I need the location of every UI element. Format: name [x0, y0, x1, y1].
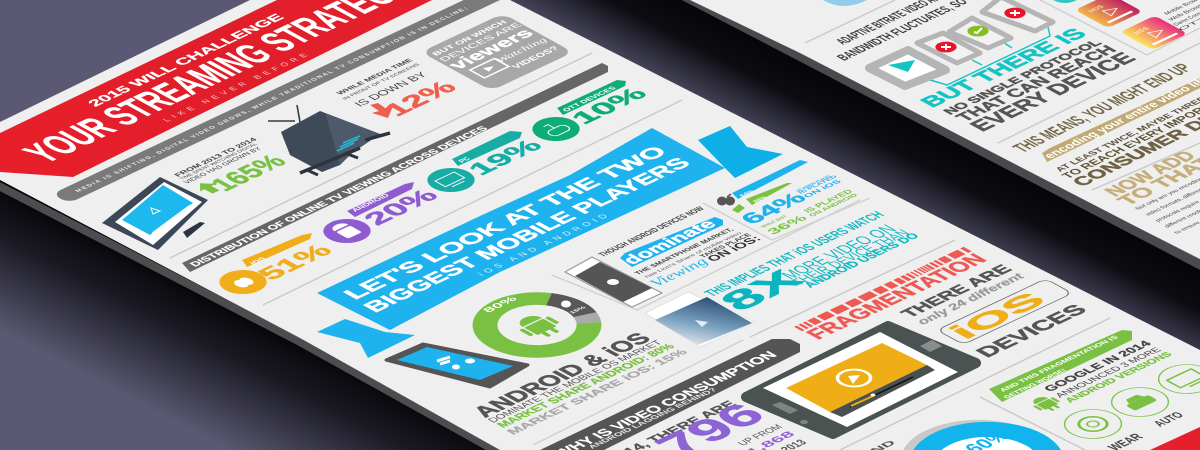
green text [760, 188, 860, 236]
icon: green up arrow [192, 180, 224, 196]
blue text: OF VIDEOS PLAYED [795, 175, 832, 192]
8x text block: MORE VIDEO ON [776, 222, 901, 282]
large cyan donut [869, 404, 1096, 450]
bottom section bar: ANDROID LAGGING BEHIND? [586, 387, 719, 450]
iphone illustration [565, 257, 662, 307]
icon: HDS tile: HDS [1087, 4, 1107, 14]
iOS tag [242, 233, 312, 267]
ribbon subheading: iOS AND ANDROID [475, 213, 610, 277]
small teal blob [1053, 0, 1077, 3]
PC tag [452, 131, 522, 166]
ios device count: DEVICES [970, 301, 1092, 360]
box text: VIDEOS? [509, 45, 561, 70]
green arrow banner: GETTING WORSE! [1003, 368, 1069, 400]
Android stat [314, 182, 445, 248]
divider [263, 100, 682, 305]
ribbon right tail [698, 126, 783, 178]
icon: apple [717, 194, 735, 206]
dominate text block: TAKES PLACE [699, 233, 754, 259]
headline: no single protocol: NO SINGLE PROTOCOL [940, 38, 1105, 116]
icon: android green [1026, 394, 1066, 414]
divider [1092, 143, 1200, 190]
icon: coral down arrow [370, 103, 393, 118]
box text: BUT ON WHICH [430, 19, 509, 57]
20 percent: 20% [357, 185, 445, 229]
icon: phone with check [949, 18, 1011, 48]
796 devices stat [585, 397, 810, 450]
10 percent: 10% [565, 84, 653, 128]
dominate text block: THE SMARTPHONE MARKET, [634, 228, 735, 276]
ribbon body [317, 128, 725, 330]
headline: no single protocol: THAT CAN REACH [951, 43, 1121, 124]
8x text block: THIS IMPLIES THAT iOS USERS WATCH [701, 209, 889, 299]
fragmentation hatch [798, 249, 968, 329]
big 64 percent: 64% [735, 189, 812, 227]
dominate text block: dominate [617, 217, 721, 267]
divider [1040, 0, 1200, 55]
ios device count: only 24 different [913, 271, 1028, 326]
64 and 36 percent stats: 64% [739, 189, 756, 198]
PC stat: PC [458, 157, 472, 164]
8x text block [701, 209, 922, 316]
android and ios text: MARKET SHARE iOS: 15% [504, 347, 691, 436]
icon: iOS circle [210, 265, 276, 299]
connector lines [930, 27, 1050, 85]
green arrow banner [989, 330, 1132, 402]
shadow under second sheet [500, 0, 1200, 450]
51 percent: 51% [251, 240, 339, 284]
green arrow banner: AND THIS FRAGMENTATION IS [999, 335, 1121, 393]
icon: video frame [470, 59, 509, 78]
stat: from 2013 to 2014: VIDEO HAS GROWN BY [183, 146, 264, 185]
icon: small android [732, 204, 745, 213]
stat: media time down: IN FRONT OF TV SCREENS [342, 63, 422, 101]
box text [430, 19, 561, 72]
large phone with video player [746, 326, 976, 434]
donut 80 percent label: 80% [481, 295, 520, 314]
headline: but there is: BUT THERE IS [915, 25, 1092, 110]
icon: Android circle [314, 214, 380, 248]
connector branches [972, 42, 1012, 65]
165 percent: 165% [204, 151, 293, 195]
distribution bar: DISTRIBUTION OF ONLINE TV VIEWING ACROSS DEVICES [188, 125, 491, 268]
icon: tablet [102, 177, 208, 250]
icon: MSS tile: MSS [1132, 26, 1152, 36]
divider [750, 240, 955, 337]
blue text: ON iOS [801, 178, 844, 199]
red corner panel [1150, 427, 1200, 450]
google 2014 text: ANDROID VERSIONS [1063, 351, 1175, 404]
icon: HDS tile [1075, 0, 1143, 28]
divider [805, 0, 895, 43]
box text: viewers [443, 26, 538, 72]
divider [170, 53, 592, 258]
shadow under first sheet [0, 180, 560, 450]
icon: tv [1147, 359, 1200, 399]
auto label: AUTO [1150, 410, 1187, 428]
android and ios text: DOMINATE THE MOBILE OS MARKET [486, 339, 666, 424]
blue text [795, 175, 844, 199]
adaptive bitrate text [832, 0, 976, 62]
iOS stat: iOS [249, 256, 268, 266]
ios device count: THERE ARE [896, 262, 1016, 320]
icon: phone with cross [917, 33, 980, 63]
google 2014 text: ANNOUNCED 3 MORE [1053, 346, 1165, 399]
first sheet edge [0, 184, 505, 450]
8x text block: 8X [710, 265, 813, 316]
icon: game controller circle [523, 112, 589, 146]
title: 2015 WILL CHALLENGE [84, 12, 287, 108]
64 and 36 percent stats [717, 160, 860, 236]
Android stat: ANDROID [351, 193, 392, 213]
19 percent: 19% [462, 136, 549, 179]
android and ios text: ANDROID & iOS [467, 329, 656, 420]
body copy [1134, 171, 1200, 235]
device list [1163, 0, 1200, 32]
green text: IS PLAYED [801, 188, 855, 214]
google 2014 text: GOOGLE IN 2014 [1041, 339, 1155, 393]
title [14, 0, 424, 169]
icon: wear [1053, 404, 1133, 444]
dominate text block: Viewing [646, 256, 713, 289]
iOS stat [210, 233, 339, 299]
PC stat [418, 131, 549, 197]
tablet photo [645, 292, 755, 347]
headline: no single protocol: EVERY DEVICE [964, 49, 1141, 134]
divider [998, 43, 1200, 143]
green text: 36% [764, 213, 811, 236]
stat: media time down: WHILE MEDIA TIME [336, 58, 415, 96]
google 2014 text [1041, 339, 1175, 404]
green 36 bar [746, 183, 792, 205]
dominate banner [620, 217, 723, 267]
icon: tablet with cross [982, 0, 1053, 31]
green text: WHILE JUST [760, 215, 788, 228]
distribution bar [182, 63, 608, 272]
second sheet [690, 0, 1200, 259]
second sheet edge [680, 0, 1200, 270]
blue text: IS PLAYED [798, 175, 839, 195]
8x text block: THEIR DEVICE THAN [788, 227, 914, 288]
ios device count [896, 262, 1092, 360]
ribbon heading: LET'S LOOK AT THE TWO [338, 143, 672, 302]
icon: PC circle [418, 163, 484, 197]
dominate text block [596, 205, 764, 289]
red title band [0, 0, 432, 177]
Android tag [347, 182, 414, 217]
64 and 36 percent stats: 36% [752, 195, 769, 204]
stat: media time down: IS DOWN BY [352, 71, 431, 108]
blue ribbon banner [317, 126, 783, 358]
donut chart [434, 273, 640, 377]
fragmentation heading: FRAGMENTATION [801, 251, 992, 342]
ribbon heading: BIGGEST MOBILE PLAYERS [358, 154, 696, 315]
796 devices stat: UP FROM [736, 423, 786, 447]
ribbon left tail [317, 319, 415, 358]
icon: old television [268, 105, 390, 175]
box text: DEVICES ARE [437, 21, 524, 63]
12 percent: 12% [377, 77, 463, 120]
stat: from 2013 to 2014 [172, 136, 264, 185]
8x text block: ANDROID USERS DO [801, 231, 922, 289]
paper 2 contents [805, 0, 1200, 235]
dividers in mobile section [533, 198, 870, 445]
dominate text block: THOUGH ANDROID DEVICES NOW [596, 205, 707, 258]
dividers lower right [840, 318, 1110, 450]
dominate text block: ON iOS: [704, 234, 764, 263]
phone with music icon [386, 344, 528, 387]
donut apple and 15 percent: 15% [569, 305, 588, 315]
ios device count: iOS [941, 288, 1054, 343]
gray intro bar: MEDIA IS SHIFTING, DIGITAL VIDEO GROWS, WHILE TRADITIONAL TV CONSUMPTION IS IN DECLINE; [74, 6, 470, 193]
icon: tablet with play [869, 50, 946, 86]
rounded outline box [937, 279, 1072, 345]
blue 64 bar [732, 160, 808, 199]
title: LIKE NEVER BEFORE [161, 52, 310, 123]
icon: MSS tile [1120, 16, 1188, 50]
icon: android in donut [509, 311, 569, 341]
stat: media time down [336, 58, 431, 108]
pale blue blob [823, 0, 867, 6]
device list: OTT [1177, 16, 1200, 32]
OTT stat [523, 80, 653, 146]
stat: from 2013 to 2014: TIME SPENT WATCHING DIGITAL [179, 142, 260, 181]
gray question box [421, 13, 573, 91]
dominate text block: has Lion's Share of mobile video [644, 231, 744, 279]
OTT tag [557, 80, 626, 115]
stat: from 2013 to 2014: FROM 2013 TO 2014 [172, 136, 260, 178]
OTT stat: OTT DEVICES [562, 86, 619, 113]
icon: auto [1100, 382, 1180, 422]
android and ios text: MARKET SHARE ANDROID: 80% [494, 342, 678, 429]
donut apple and 15 percent [561, 300, 588, 315]
box text: Watching [493, 37, 550, 64]
green text: ON ANDROID [808, 193, 860, 218]
